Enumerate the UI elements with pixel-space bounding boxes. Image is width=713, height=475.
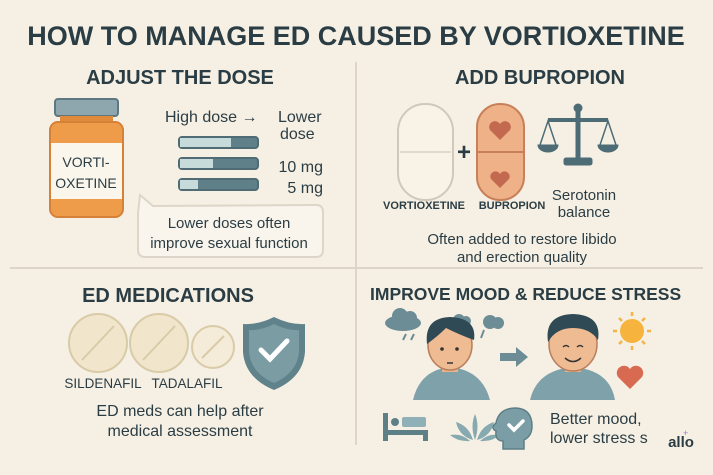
icon: stressed person [413, 317, 490, 400]
text: better mood: Better mood, [550, 411, 642, 428]
labels [64, 376, 264, 440]
icon: pill bottle [50, 99, 123, 217]
icon: pill bottle: OXETINE [55, 175, 117, 191]
panel: adjust the dose [50, 67, 323, 257]
icon: happy person [530, 314, 615, 400]
callout: Lower doses often [168, 215, 290, 232]
labels: SILDENAFIL [64, 376, 142, 391]
icon: bupropion pill [477, 104, 524, 200]
icon: bed [383, 413, 428, 441]
logo: allo: + [683, 428, 688, 438]
icon: pills [69, 314, 234, 372]
text: better mood: lower stress s [550, 430, 648, 447]
icon: heart [617, 366, 643, 389]
heading: adjust the dose: ADJUST THE DOSE [86, 67, 274, 89]
icon: head with check [493, 408, 532, 449]
icon: pill bottle: VORTI- [62, 154, 110, 170]
labels: VORTIOXETINE [383, 200, 465, 212]
icon: sun [613, 312, 651, 350]
text: better mood [550, 411, 648, 447]
heading: improve mood: IMPROVE MOOD & REDUCE STRESS [370, 284, 681, 304]
logo: allo: allo [668, 434, 694, 451]
panel: add bupropion [383, 67, 625, 266]
labels [383, 187, 617, 266]
labels: BUPROPION [479, 200, 545, 212]
heading: ed medications: ED MEDICATIONS [82, 285, 254, 307]
plus sign: + [457, 139, 471, 166]
icon: clouds [385, 308, 504, 340]
dose labels: 10 mg [279, 159, 323, 176]
dose labels: dose [280, 126, 315, 143]
dose labels: Lower [278, 109, 322, 126]
panel: ed medications [64, 285, 305, 440]
labels: TADALAFIL [151, 376, 223, 391]
icon: scale [538, 104, 618, 165]
icon: shield [243, 317, 305, 390]
bar chart: doses [179, 137, 258, 190]
callout [138, 195, 323, 257]
arrow [500, 347, 528, 367]
labels: ED meds can help after [96, 403, 264, 420]
dose labels: High dose → [165, 109, 258, 126]
labels: and erection quality [457, 249, 588, 266]
heading: add bupropion: ADD BUPROPION [455, 67, 625, 89]
callout: improve sexual function [150, 235, 308, 252]
labels: medical assessment [108, 423, 253, 440]
icon: lotus [450, 414, 500, 441]
panel: improve mood [370, 284, 694, 451]
icon: vortioxetine pill [398, 104, 453, 200]
labels: Often added to restore libido [427, 231, 617, 248]
title: HOW TO MANAGE ED CAUSED BY VORTIOXETINE [27, 21, 685, 51]
labels: Serotonin [552, 187, 616, 204]
dose labels: 5 mg [287, 180, 323, 197]
dose labels [165, 109, 323, 197]
labels: balance [558, 204, 610, 221]
